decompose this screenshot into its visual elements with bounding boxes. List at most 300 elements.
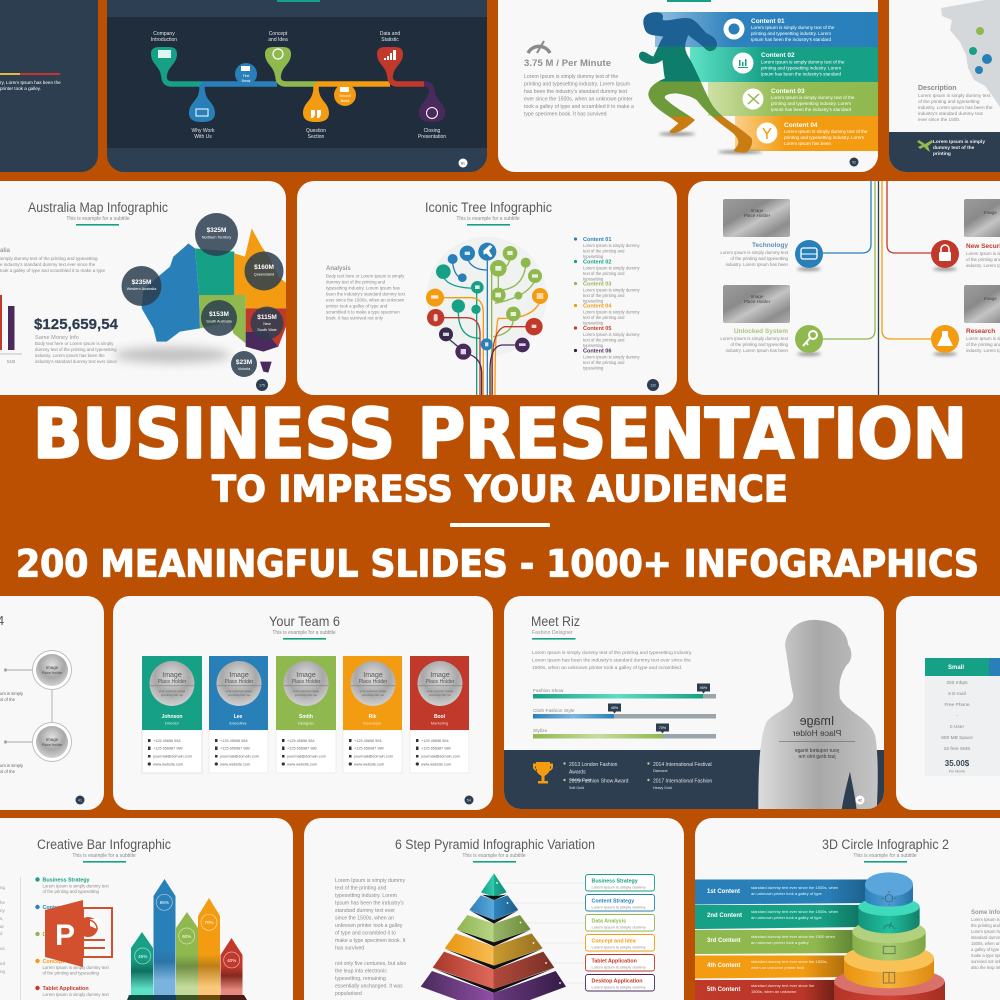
australia map [142, 228, 287, 373]
content 05 item: Content 05 [583, 326, 611, 332]
mirrored placeholder text: Place Holder [793, 728, 841, 738]
bubble: northern territory: Northern Territory [202, 236, 231, 240]
table body [925, 676, 1000, 776]
card: lee: Image [229, 672, 249, 679]
first break bubble [235, 63, 257, 85]
side heading and text: alia [0, 248, 11, 254]
icon: hard drive [795, 240, 823, 271]
box: tablet application: Tablet Application [592, 958, 637, 964]
box: desktop application: Desktop Application [592, 978, 643, 984]
band: 2nd content [695, 905, 865, 929]
content 04 item: Lorem Ipsum is simply dummy [583, 310, 640, 314]
band: 2nd content: 2nd Content [707, 913, 742, 919]
band: 1st content: an unknown printer took a galley of type [751, 891, 822, 896]
text block [918, 93, 993, 122]
awards list: Soft Gold [569, 786, 584, 790]
table rows: 0 User [950, 724, 964, 730]
content list [574, 237, 640, 370]
table rows: 600 MB Space [941, 735, 973, 741]
bubble: northern territory: $325M [207, 227, 226, 234]
card: johnson: yourmail@domain.com [153, 754, 192, 758]
table rows [941, 680, 973, 752]
list item: business strategy [35, 877, 109, 894]
left text column: ar [0, 924, 4, 929]
panel: iconic tree slide [297, 181, 677, 395]
image circle 2: Place Holder [42, 743, 63, 747]
list item: data analysis [35, 932, 55, 938]
image circle 1 [32, 650, 72, 690]
text block: ever since the 1500s, when an unknown printer [524, 96, 633, 102]
bubble: queensland: Queensland [254, 272, 274, 276]
bubble: queensland: $160M [254, 264, 274, 271]
bubble: victoria: $23M [236, 359, 252, 366]
first break bubble: Break [242, 79, 251, 83]
image placeholder: research [964, 285, 1000, 323]
text block: not only five centuries, but also [335, 961, 406, 967]
card: johnson: Johnson [162, 714, 182, 720]
content 02: Content 02 [761, 52, 795, 59]
awards list: Awards [569, 770, 586, 776]
awards list: 2014 International Festival [653, 762, 712, 768]
card: johnson [142, 656, 202, 773]
map markers [969, 27, 992, 74]
bubble: victoria: Victoria [238, 367, 251, 371]
content 03 item: Lorem Ipsum is simply dummy [583, 288, 640, 292]
band: 4th content: when an unknown printer took [751, 965, 804, 970]
page number: 132 [650, 384, 656, 388]
second break bubble: Break [341, 99, 350, 103]
image placeholder: research: Image [984, 296, 997, 301]
content 01 item: text of the printing and [583, 248, 625, 254]
box: desktop application: Lorem Ipsum is simply dummy [592, 984, 646, 990]
panel: pyramid slide [304, 818, 684, 1000]
panel: meet riz slide [504, 596, 884, 810]
analysis text: book. It has survived not only [326, 316, 384, 320]
box: data analysis [586, 914, 654, 931]
stat heading: 3.75 M / Per Minute [524, 58, 611, 69]
text block: since the 1500s, when an [335, 916, 394, 922]
card: smith: +125 45656 554 [287, 739, 315, 743]
card: rik [343, 656, 402, 773]
content 03: Ipsum has been the industry's standard [771, 107, 851, 112]
page number [76, 796, 84, 804]
bubble: south australia: $153M [209, 311, 229, 318]
mirrored placeholder text: your required image [795, 748, 839, 754]
card: rik: your required image [360, 689, 387, 693]
card: smith [276, 656, 336, 773]
card: smith: Designer [298, 720, 315, 726]
band: 1st content [695, 880, 870, 904]
table rows: - [956, 714, 958, 719]
analysis text: dummy text of the printing and [326, 280, 386, 284]
content 04 item: Content 04 [583, 304, 612, 310]
arrow chart: 65% [160, 900, 169, 905]
bubble: new south wales: South Wale [257, 328, 277, 332]
box: concept and idea: Concept and Idea [592, 938, 636, 944]
text block: standard dummy text ever [335, 908, 395, 914]
table rows: 5 E-mail [948, 691, 966, 697]
content 05 item: text of the printing and [583, 338, 625, 342]
foot shadows [659, 132, 762, 154]
row leader lines [505, 883, 585, 983]
arrow chart: 45% [138, 954, 147, 959]
list item: content strategy: Content [42, 905, 63, 911]
arrow chart [127, 879, 247, 1000]
title: Creative Bar Infographic [37, 837, 171, 852]
skill bar: stylize [533, 724, 716, 738]
some info text [971, 917, 1000, 970]
pin: closing presentation [419, 91, 445, 122]
subtitle: Fashion Designer [532, 630, 573, 636]
band: 5th content: standard dummy text ever since the [751, 983, 815, 988]
content 02: Ipsum has been the industry's standard [761, 72, 841, 76]
map [941, 0, 1000, 107]
skill bar: cloth fashion style: 45% [611, 706, 619, 710]
technology text: industry. Lorem Ipsum has been [726, 262, 789, 267]
awards list: Saving Gold [569, 777, 591, 782]
card: lee: just drag into me [227, 693, 250, 697]
text block: typesetting industry. Lorem [335, 893, 397, 899]
band: 1st content: standard dummy text ever since the 1500s, when [751, 885, 838, 890]
price: Per Month [949, 770, 965, 774]
intro text: 1500s, when an unknown printer took a galley of type and scrambled. [532, 665, 682, 671]
timeline labels: Statistic [381, 37, 399, 43]
card: bool: your required image [427, 689, 454, 693]
content 03 [742, 88, 855, 112]
mirrored placeholder text: just drag into me [798, 754, 836, 760]
analysis heading: Analysis [326, 266, 351, 272]
page number: 92 [852, 160, 856, 164]
map shadow [114, 347, 230, 363]
content bands [655, 12, 878, 151]
page number [256, 379, 268, 391]
icon: plane [917, 140, 933, 152]
skill bar: stylize: 70% [659, 726, 667, 730]
bubble: western australia [122, 266, 162, 306]
pin: question section [303, 91, 329, 122]
research text [966, 336, 1000, 353]
second break bubble [334, 84, 356, 106]
awards list: Heavy Gold [653, 786, 672, 790]
skill bar: cloth fashion style [533, 704, 716, 718]
card: smith: your required image [293, 689, 320, 693]
timeline labels: With Us [194, 134, 212, 140]
unlocked system text: of the printing and typesetting [730, 342, 789, 347]
text block: Ipsum has been the industry's [335, 900, 404, 906]
text block [35, 341, 117, 364]
table header [925, 658, 1000, 676]
timeline labels: Why Work [192, 128, 215, 134]
skill bar: fashion show [533, 684, 716, 698]
list item: content strategy [35, 905, 106, 916]
text block: type specimen book. It has survived [524, 112, 607, 118]
text fragments: um is simply [0, 763, 24, 768]
bubble: new south wales: $115M [257, 314, 277, 321]
band: 3rd content: 3rd Content [707, 938, 741, 944]
page number: 175 [259, 384, 265, 388]
content 03 item: typesetting [583, 298, 604, 304]
left text column: s, [0, 916, 3, 921]
side heading and text [0, 248, 106, 273]
arrow chart: 60% [182, 934, 191, 939]
text block: has been the industry's standard dummy text [524, 89, 628, 95]
bubble: new south wales [250, 306, 284, 340]
image placeholder: new security [964, 199, 1000, 237]
card: bool: www.website.com [421, 762, 451, 766]
panel: runner slide [498, 0, 878, 172]
bubble: south australia: South Australia [206, 320, 233, 324]
content 04 item [574, 304, 640, 326]
skill bar: cloth fashion style: Cloth Fashion Style [533, 708, 575, 714]
text block: typesetting, remaining [335, 976, 386, 982]
footer text: dummy text of the [933, 145, 975, 151]
text block: essentially unchanged. It was [335, 984, 403, 990]
content 04 item: typesetting [583, 320, 604, 326]
list item: concept and idea: Lorem Ipsum is simply dummy text [42, 965, 109, 970]
list item: concept and idea: Concept [42, 959, 64, 965]
3d stacked cylinders [834, 872, 945, 1000]
technology text: of the printing and typesetting [730, 256, 789, 261]
text block: make a type specimen book. It [335, 938, 406, 944]
awards list [563, 762, 712, 790]
title: 3D Circle Infographic 2 [822, 837, 949, 852]
timeline labels: Concept [269, 31, 288, 37]
card: smith: Place Holder [292, 679, 321, 685]
page number: 41 [78, 798, 82, 802]
card: smith: Image [296, 672, 316, 679]
content 03 item: text of the printing and [583, 293, 625, 298]
bubble: new south wales: New [263, 322, 271, 326]
image placeholder: unlocked system [723, 285, 790, 323]
new security text [966, 251, 1000, 268]
text block: unknown printer took a galley [335, 923, 403, 929]
content 03: printing and typesetting industry. Lorem [771, 101, 851, 106]
band: 1st content: 1st Content [707, 889, 740, 895]
card: lee: your required image [226, 689, 253, 693]
image placeholder: new security: Image [984, 210, 997, 215]
subtitle: This is example for a subtitle [66, 216, 130, 222]
box: business strategy: Business Strategy [592, 878, 638, 884]
text block: dummy text of the printing and typesetting [35, 347, 117, 352]
card: johnson: www.website.com [153, 762, 183, 766]
awards list: 2013 London Fashion [569, 762, 618, 768]
band: 2nd content: standard dummy text ever since the 1500s, when [751, 909, 838, 914]
text block: ever since the 1500. [918, 117, 960, 122]
band: 4th content [695, 956, 850, 978]
tree [426, 237, 548, 395]
left text column: he [0, 900, 5, 905]
content 05 item: Lorem Ipsum is simply dummy [583, 332, 640, 337]
bubble: south australia [201, 300, 237, 336]
analysis text: ever since the 1500s, when an unknown [326, 298, 405, 302]
band: 3rd content: standard dummy text ever since the 1500 when [751, 934, 835, 939]
arrow chart: 40% [227, 958, 236, 963]
text block [524, 74, 634, 118]
band: 5th content [695, 980, 850, 1000]
intro text: Lorem Ipsum is simply dummy text of the printing and typesetting industry. [532, 650, 692, 656]
text block: the leap into electronic [335, 968, 387, 974]
analysis text: Body text here or Lorem Ipsum is simply [326, 274, 405, 278]
content 03: Lorem Ipsum is simply dummy text of the [771, 95, 855, 100]
subtitle: This is example for a subtitle [462, 853, 526, 859]
band: 5th content: 1500s, when an unknown [751, 989, 796, 994]
content 01 item: typesetting [583, 254, 604, 259]
subtitle: This is example for a subtitle [272, 630, 336, 636]
content 03 item [574, 282, 640, 304]
price: 35.00$ [945, 759, 970, 768]
text block: took a galley of type and scrambled it to make a [524, 104, 634, 110]
card: bool: Place Holder [426, 679, 455, 685]
text block: of the printing and typesetting [918, 99, 980, 104]
table header: Small [948, 665, 964, 671]
content 05 item: typesetting [583, 343, 604, 348]
panel: 3d circle slide [695, 818, 1000, 1000]
text fragments: um is simply [0, 691, 24, 696]
money label: Same Money Info [35, 335, 79, 341]
timeline labels: Question [306, 128, 326, 134]
text block: industry's standard dummy text ever since [35, 359, 117, 364]
text block: printing and typesetting industry. Lorem Ipsum [524, 82, 630, 88]
image circle 2: Image [46, 737, 59, 742]
box: concept and idea [586, 934, 654, 951]
image placeholder: technology: Place Holder [744, 213, 771, 218]
footer text [933, 139, 985, 157]
timeline labels: Data and [380, 31, 400, 37]
panel: pricing table slide [896, 596, 1000, 810]
card: smith: +125 656987 989 [287, 746, 317, 750]
card: lee: Place Holder [225, 679, 254, 685]
title: 6 Step Pyramid Infographic Variation [395, 837, 595, 852]
list item: business strategy: of the printing and typesetting [42, 889, 99, 894]
technology text [720, 250, 789, 267]
box: content strategy [586, 894, 654, 911]
content 05 item [574, 326, 640, 348]
card: johnson: just drag into me [160, 693, 183, 697]
card: smith: yourmail@domain.com [287, 754, 326, 758]
unlocked system heading: Unlocked System [734, 328, 788, 335]
text block: of type and scrambled it to [335, 930, 396, 936]
text fragments: xt of the [0, 697, 16, 702]
content 06 item: Content 06 [583, 348, 611, 354]
content 01 item [574, 237, 640, 259]
box: business strategy [586, 874, 654, 891]
text block: industry. Lorem Ipsum has been the [35, 353, 105, 358]
analysis text: typesetting industry. Lorem Ipsum has [326, 286, 401, 290]
content 01 item: Content 01 [583, 237, 611, 243]
table rows: Free Phone [944, 702, 970, 708]
analysis text [326, 274, 406, 320]
card: lee: Lee [234, 714, 243, 720]
connector lines [823, 181, 931, 395]
content 06 item: typesetting [583, 366, 604, 370]
list item: tablet application: Tablet Application [42, 986, 89, 992]
some info heading: Some Info [971, 910, 1000, 916]
bubble: western australia: $235M [132, 279, 151, 286]
left text column: ng [0, 969, 5, 974]
content 04: Content 04 [784, 122, 818, 129]
card: smith: just drag into me [294, 693, 317, 697]
content 02 [732, 52, 845, 76]
box: desktop application [586, 974, 654, 991]
footer text: Lorem Ipsum is simply [933, 139, 985, 145]
card: johnson: +125 656987 989 [153, 746, 183, 750]
analysis text: printer took a galley of type and [326, 304, 388, 308]
text block: ry, Lorem Ipsum has been the [0, 80, 61, 85]
image placeholder: technology [723, 199, 790, 237]
panel: dark slide top left: printer took a galley. [0, 86, 41, 91]
content 01 [724, 18, 835, 42]
card: rik: Developer [363, 720, 382, 726]
pin: concept and idea [265, 47, 291, 76]
timeline labels: and Idea [268, 37, 288, 43]
panel: process circles slide [0, 596, 104, 810]
timeline connector [164, 62, 432, 108]
subtitle: This is example for a subtitle [853, 853, 917, 859]
awards list: 2015 Fashion Show Award [569, 778, 629, 784]
content 01: Content 01 [751, 18, 785, 25]
technology text: Lorem Ipsum is simply dummy text [720, 250, 789, 255]
icon: key [795, 325, 823, 356]
page number: 54 [467, 798, 471, 802]
band: 5th content: 5th Content [707, 987, 740, 993]
text block: Lorem Ipsum is simply dummy text of the [524, 74, 618, 80]
card: smith: www.website.com [287, 762, 317, 766]
second break bubble: Second [339, 94, 351, 98]
banner: headline [16, 394, 979, 586]
bubble: victoria [231, 351, 257, 377]
band: 4th content: 4th Content [707, 963, 740, 969]
text fragments: xt of the [0, 769, 16, 774]
research heading: Research [966, 328, 995, 335]
bubble: queensland [244, 252, 284, 290]
list item: concept and idea: of the printing and typesetting [42, 970, 99, 976]
image circle 1: Image [46, 665, 59, 670]
card: bool: yourmail@domain.com [421, 754, 460, 758]
card: lee: www.website.com [220, 762, 250, 766]
unlocked system text [720, 336, 789, 353]
icon: powerpoint logo: P [55, 919, 75, 952]
content 04 [756, 122, 868, 146]
image circle 2 [32, 722, 72, 762]
box: data analysis: Lorem Ipsum is simply dummy [592, 924, 646, 930]
text block: has survived [335, 946, 364, 952]
content 01: Ipsum has been the industry's standard [751, 37, 831, 42]
box: data analysis: Data Analysis [592, 918, 626, 924]
footer text: printing [933, 151, 951, 157]
image circle 1: Place Holder [42, 671, 63, 675]
text fragments [0, 691, 24, 774]
card: rik: Rik [369, 714, 377, 720]
technology heading: Technology [752, 242, 788, 249]
timeline labels: Introduction [151, 37, 177, 43]
page number [458, 158, 468, 168]
divider [450, 523, 550, 527]
card: bool: +125 45656 554 [421, 739, 449, 743]
side heading and text: simply dummy text of the printing and typesetting [0, 256, 98, 261]
text block: Body text here or Lorem Ipsum is simply [35, 341, 114, 346]
card: rik: www.website.com [354, 762, 384, 766]
panel: timeline slide [107, 0, 487, 172]
left text column: ng [0, 885, 5, 890]
side heading and text: took a galley of type and scrambled it to make a type [0, 268, 106, 273]
panel: world map slide [889, 0, 1000, 172]
content 02 item: Content 02 [583, 260, 611, 266]
title: Australia Map Infographic [28, 200, 168, 215]
analysis text: been the industry's standard dummy text [326, 292, 406, 296]
mirrored placeholder text [779, 714, 855, 760]
icon: powerpoint logo [45, 900, 112, 967]
page number [856, 796, 864, 804]
